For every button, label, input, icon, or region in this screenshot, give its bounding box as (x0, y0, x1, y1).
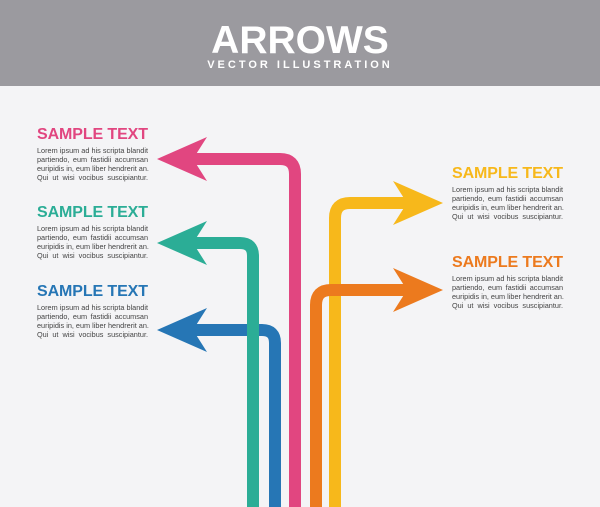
arrow: pink (157, 137, 295, 507)
arrow: orange (316, 268, 443, 507)
text block: yellow: partiendo, eum fastidii accumsan (452, 194, 563, 203)
arrow: blue (157, 308, 275, 507)
text block: orange: Lorem ipsum ad his scripta blandit (452, 274, 563, 283)
text block: blue (37, 283, 149, 339)
text block: orange: Qui ut wisi vocibus suscipiantur. (452, 301, 563, 310)
text block: pink: Lorem ipsum ad his scripta blandit (37, 146, 148, 155)
text block: blue: SAMPLE TEXT (37, 283, 148, 300)
text block: yellow: Lorem ipsum ad his scripta blandit (452, 185, 563, 194)
subtitle: VECTOR ILLUSTRATION (207, 59, 393, 71)
text block: blue: Qui ut wisi vocibus suscipiantur. (37, 330, 148, 339)
text block: yellow: euripidis in, eum liber hendrerit an. (452, 203, 564, 212)
text block: orange: euripidis in, eum liber hendrerit an. (452, 292, 564, 301)
title: ARROWS (211, 19, 389, 62)
text block: pink (37, 126, 149, 182)
text block: pink: partiendo, eum fastidii accumsan (37, 155, 148, 164)
text block: teal (37, 204, 149, 260)
text block: teal: SAMPLE TEXT (37, 204, 148, 221)
text block: yellow: Qui ut wisi vocibus suscipiantur. (452, 212, 563, 221)
text block: blue: Lorem ipsum ad his scripta blandit (37, 303, 148, 312)
text block: orange: SAMPLE TEXT (452, 254, 563, 271)
text block: teal: Qui ut wisi vocibus suscipiantur. (37, 251, 148, 260)
text block: pink: Qui ut wisi vocibus suscipiantur. (37, 173, 148, 182)
text block: blue: euripidis in, eum liber hendrerit an. (37, 321, 149, 330)
text block: pink: euripidis in, eum liber hendrerit an. (37, 164, 149, 173)
header band (0, 0, 600, 86)
text block: pink: SAMPLE TEXT (37, 126, 148, 143)
text block: yellow (452, 165, 564, 221)
text block: orange: partiendo, eum fastidii accumsan (452, 283, 563, 292)
text block: yellow: SAMPLE TEXT (452, 165, 563, 182)
text block: blue: partiendo, eum fastidii accumsan (37, 312, 148, 321)
arrow: yellow (335, 181, 443, 507)
text block: orange (452, 254, 564, 310)
arrow: teal (157, 221, 253, 507)
text block: teal: partiendo, eum fastidii accumsan (37, 233, 148, 242)
text block: teal: Lorem ipsum ad his scripta blandit (37, 224, 148, 233)
text block: teal: euripidis in, eum liber hendrerit an. (37, 242, 149, 251)
